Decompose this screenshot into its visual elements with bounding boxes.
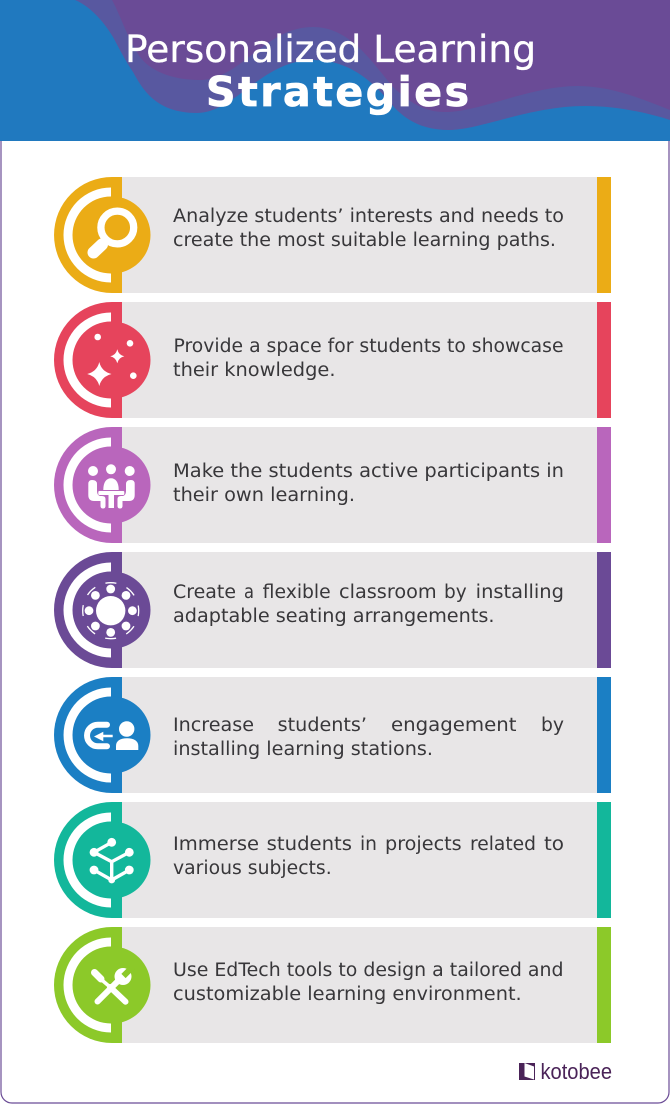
text: strategy 6: Immerse (173, 834, 259, 855)
header banner (0, 0, 670, 141)
text: strategy 1: Analyze students’ interests and needs to (173, 206, 564, 227)
panel: strategy 6 (54, 802, 611, 918)
title: Personalized Learning (125, 28, 536, 71)
text: strategy 4 (173, 582, 564, 627)
text: strategy 3: their own learning. (173, 485, 355, 506)
text: strategy 6: students (267, 834, 352, 855)
text: strategy 5: Increase (173, 715, 254, 736)
text: strategy 4: by (444, 582, 467, 603)
title: Strategies (206, 68, 469, 116)
text: strategy 5: engagement (391, 715, 516, 736)
text: strategy 2: Provide a space for students to showcase (174, 336, 564, 357)
text: strategy 2: their knowledge. (173, 360, 336, 381)
text: strategy 4: installing (476, 582, 564, 603)
text: strategy 3: Make the students active participants in (173, 461, 564, 482)
title (125, 28, 536, 116)
text: strategy 2 (173, 336, 564, 381)
text: strategy 6: various subjects. (173, 858, 332, 879)
text: strategy 5: installing learning stations. (173, 739, 433, 760)
icon: round seating table (83, 583, 139, 639)
panel: strategy 7 (54, 927, 611, 1043)
text: strategy 5 (173, 715, 564, 760)
text: strategy 4: Create (173, 582, 236, 603)
text: strategy 1: create the most suitable learning paths. (173, 230, 556, 251)
panel: strategy 2 (54, 302, 611, 418)
panel: strategy 5 (54, 677, 611, 793)
panel: strategy 1 (54, 177, 611, 293)
panel: strategy 3 (54, 427, 611, 543)
text: strategy 7: customizable learning environment. (173, 984, 522, 1005)
icon: people around table (88, 464, 135, 508)
icon: wrench and screwdriver (94, 966, 133, 1002)
text: strategy 6: projects (385, 834, 462, 855)
text: strategy 7 (173, 960, 564, 1005)
logo: kotobee: kotobee (540, 1059, 612, 1084)
text: strategy 6: to (544, 834, 564, 855)
text: strategy 1 (173, 206, 564, 251)
text: strategy 6: related (470, 834, 536, 855)
icon: magnifying glass (94, 211, 134, 252)
text: strategy 4: classroom (339, 582, 437, 603)
icon: magnet and person (87, 721, 138, 750)
icon: sparkles (87, 334, 137, 386)
text: strategy 4: a (244, 582, 254, 603)
text: strategy 3 (173, 461, 564, 506)
text: strategy 5: students’ (278, 715, 367, 736)
panel: strategy 4 (54, 552, 611, 668)
text: strategy 6 (173, 834, 564, 879)
text: strategy 4: flexible (263, 582, 331, 603)
text: strategy 5: by (541, 715, 564, 736)
text: strategy 6: in (360, 834, 377, 855)
text: strategy 4: adaptable seating arrangements. (173, 606, 494, 627)
icon: branching network (90, 838, 134, 883)
text: strategy 7: Use EdTech tools to design a tailored and (173, 960, 564, 981)
